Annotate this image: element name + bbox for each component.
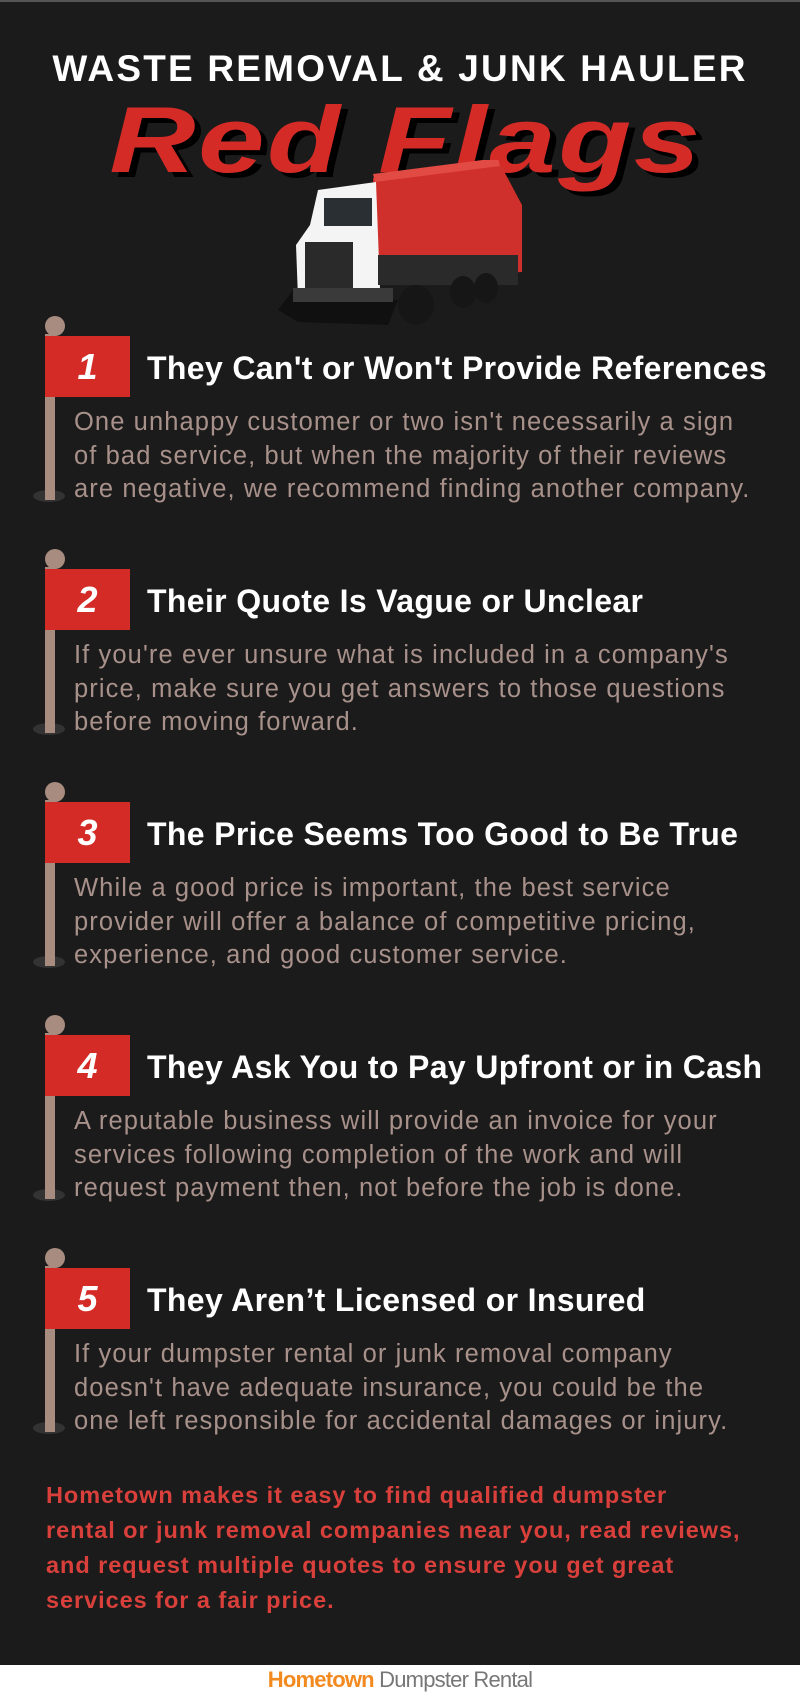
heading 4: They Ask You to Pay Upfront or in Cash [147, 1049, 762, 1085]
body 2: price, make sure you get answers to those questions [74, 674, 725, 702]
body 5: doesn't have adequate insurance, you could be the [74, 1374, 704, 1402]
icon: truck [278, 160, 522, 325]
body 1: are negative, we recommend finding another company. [74, 475, 750, 503]
headline: Red Flags: Red Flags [109, 87, 703, 192]
body 3 [74, 874, 696, 969]
item 2 [33, 549, 729, 736]
closing callout: Hometown makes it easy to find qualified dumpster [46, 1482, 667, 1508]
icon: flag 4: 4 [77, 1045, 98, 1086]
heading 2: Their Quote Is Vague or Unclear [147, 583, 643, 619]
body 4: services following completion of the work and will [74, 1140, 683, 1168]
item 3 [33, 782, 738, 969]
icon: flag 5 [33, 1248, 130, 1434]
heading 5: They Aren’t Licensed or Insured [147, 1282, 646, 1318]
body 5: one left responsible for accidental damages or injury. [74, 1407, 728, 1435]
title: WASTE REMOVAL & JUNK HAULER [52, 48, 748, 89]
body 2: before moving forward. [74, 708, 359, 736]
footer band [0, 1665, 800, 1695]
icon: flag 1 [33, 316, 130, 502]
icon: flag 3: 3 [77, 812, 98, 853]
icon: flag 2: 2 [77, 579, 98, 620]
item 5 [33, 1248, 728, 1435]
body 2 [74, 641, 729, 736]
footer logo: Hometown Dumpster Rental [268, 1667, 532, 1692]
icon: flag 2 [33, 549, 130, 735]
body 3: experience, and good customer service. [74, 941, 568, 969]
closing callout: and request multiple quotes to ensure you get great [46, 1552, 674, 1578]
closing callout: rental or junk removal companies near you, read reviews, [46, 1517, 740, 1543]
closing callout: services for a fair price. [46, 1587, 335, 1613]
heading 1: They Can't or Won't Provide References [147, 350, 767, 386]
icon: flag 3 [33, 782, 130, 968]
body 3: While a good price is important, the best service [74, 874, 671, 902]
body 1: One unhappy customer or two isn't necessarily a sign [74, 408, 734, 436]
item 4 [33, 1015, 762, 1202]
body 1 [74, 408, 750, 503]
item 1 [33, 316, 767, 503]
body 3: provider will offer a balance of competitive pricing, [74, 908, 696, 936]
icon: flag 5: 5 [77, 1278, 98, 1319]
body 4: A reputable business will provide an invoice for your [74, 1107, 718, 1135]
closing callout [46, 1482, 740, 1613]
heading 3: The Price Seems Too Good to Be True [147, 816, 738, 852]
body 1: of bad service, but when the majority of their reviews [74, 442, 727, 470]
top border [0, 0, 800, 2]
body 4 [74, 1107, 718, 1202]
body 2: If you're ever unsure what is included in a company's [74, 641, 729, 669]
body 4: request payment then, not before the job is done. [74, 1174, 684, 1202]
icon: flag 1: 1 [77, 346, 98, 387]
icon: flag 4 [33, 1015, 130, 1201]
body 5 [74, 1340, 728, 1435]
body 5: If your dumpster rental or junk removal company [74, 1340, 673, 1368]
